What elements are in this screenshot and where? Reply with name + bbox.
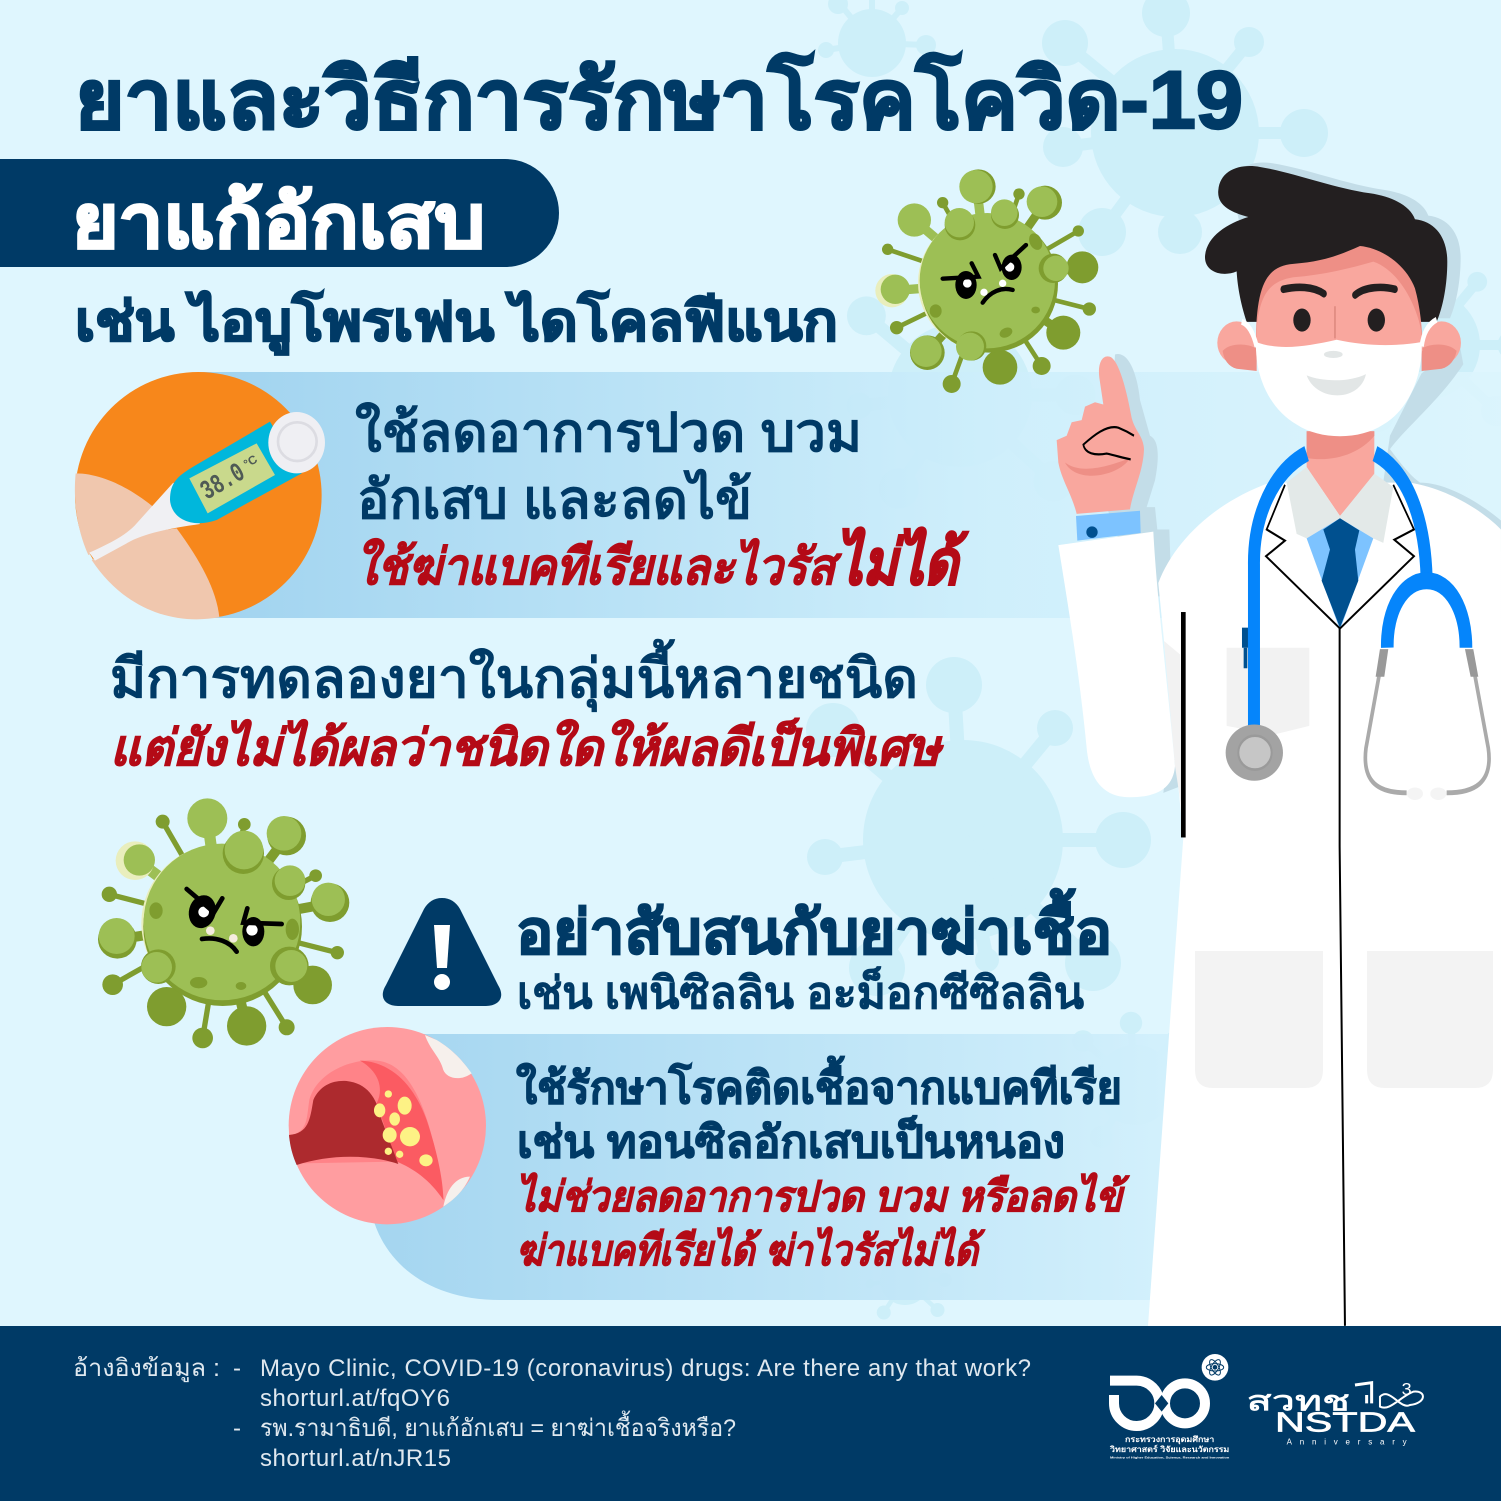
logo: NSTDA: NSTDA [1275, 1407, 1415, 1438]
panel text: uses: ใช้ฆ่าแบคทีเรียและไวรัส [355, 538, 843, 595]
panel text: antibiotic uses: ใช้รักษาโรคติดเชื้อจากแบคทีเรีย [516, 1055, 1122, 1113]
panel text: antibiotic uses: ฆ่าแบคทีเรียได้ ฆ่าไวรัสไม่ได้ [516, 1226, 986, 1274]
coat pockets [1195, 951, 1493, 1088]
references: shorturl.at/fqOY6 [260, 1385, 450, 1412]
panel text: uses: ไม่ได้ [836, 527, 969, 598]
antibiotic examples: เช่น เพนิซิลลิน อะม็อกซีซิลลิน [517, 967, 1084, 1018]
panel text: antibiotic uses [516, 1055, 1130, 1274]
panel text: uses: ใช้ลดอาการปวด บวม [355, 402, 862, 463]
text: trial note: มีการทดลองยาในกลุ่มนี้หลายชนิด [110, 640, 918, 712]
logo: ministry: กระทรวงการอุดมศึกษา [1125, 1435, 1214, 1445]
logo: NSTDA [1247, 1379, 1423, 1446]
text: trial note [110, 640, 944, 776]
doctor illustration [1057, 162, 1501, 1326]
panel: anti-inflammatory info [200, 372, 1501, 618]
logo: ministry [1109, 1354, 1230, 1459]
panel: antibiotic info [372, 1034, 1175, 1300]
references [73, 1355, 1031, 1472]
references: อ้างอิงข้อมูล : [73, 1355, 220, 1383]
references: - [233, 1355, 241, 1382]
references: shorturl.at/nJR15 [260, 1445, 451, 1472]
panel text: uses: อักเสบ และลดไข้ [357, 469, 752, 530]
logo: ministry: วิทยาศาสตร์ วิจัยและนวัตกรรม [1109, 1444, 1229, 1454]
logo: NSTDA: สวทช [1247, 1386, 1350, 1417]
references: - [233, 1415, 241, 1442]
references: รพ.รามาธิบดี, ยาแก้อักเสบ = ยาฆ่าเชื้อจริงหรือ? [260, 1410, 736, 1442]
heading pill: anti-inflammatory [0, 159, 559, 267]
icon: virus lower [98, 798, 349, 1048]
warning heading: อย่าสับสนกับยาฆ่าเชื้อ [516, 888, 1112, 966]
icon: virus top [875, 169, 1098, 393]
heading pill: anti-inflammatory: ยาแก้อักเสบ [72, 180, 485, 263]
title: ยาและวิธีการรักษาโรคโควิด-19 [75, 53, 1243, 146]
logo: ministry: Ministry of Higher Education, Science, Research and Innovation [1110, 1455, 1230, 1459]
drug examples: เช่น ไอบูโพรเฟน ไดโคลฟีแนก [75, 290, 838, 355]
icon: thermometer [75, 372, 325, 619]
icon: inflamed throat [289, 1027, 486, 1224]
footer bar [0, 1326, 1501, 1501]
icon: thermometer: °C [241, 452, 260, 471]
text: trial note: แต่ยังไม่ได้ผลว่าชนิดใดให้ผลดีเป็นพิเศษ [110, 717, 944, 776]
panel text: antibiotic uses: ไม่ช่วยลดอาการปวด บวม หรือลดไข้ [516, 1172, 1130, 1220]
references: Mayo Clinic, COVID-19 (coronavirus) drugs: Are there any that work? [260, 1355, 1031, 1382]
background virus pattern [806, 0, 1501, 1320]
logo: NSTDA: 3 [1402, 1379, 1412, 1399]
panel text: uses [355, 402, 969, 598]
panel text: antibiotic uses: เช่น ทอนซิลอักเสบเป็นหนอง [517, 1115, 1065, 1167]
icon: warning triangle [383, 898, 501, 1006]
logo: NSTDA: Anniversary [1287, 1437, 1407, 1446]
icon: thermometer: 38.0 [196, 458, 251, 508]
